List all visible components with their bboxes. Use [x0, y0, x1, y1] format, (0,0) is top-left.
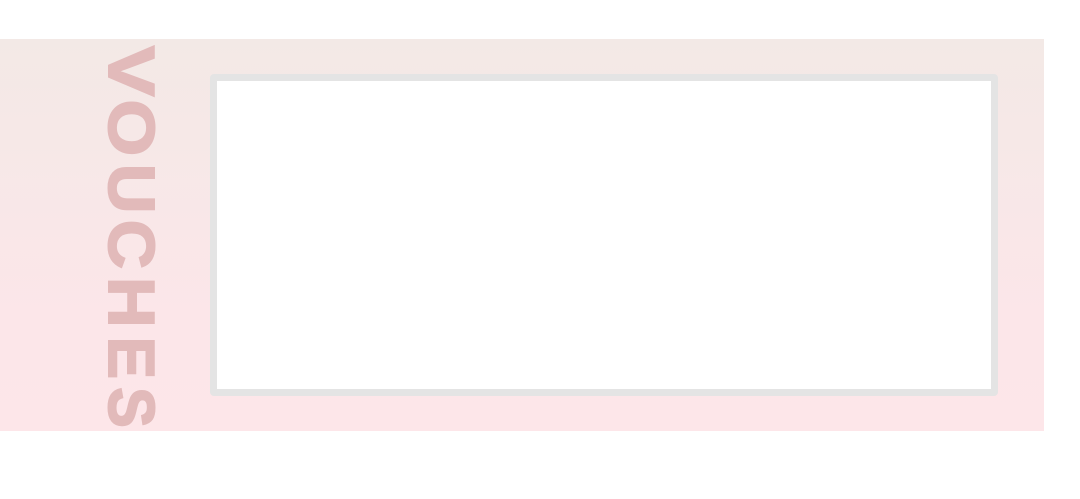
heading: vertical VOUCHES: V	[95, 46, 168, 96]
panel: empty white card with grey border	[210, 74, 998, 396]
heading: vertical VOUCHES: S	[95, 387, 168, 428]
heading: vertical VOUCHES: E	[95, 337, 168, 379]
heading: vertical VOUCHES: C	[95, 220, 168, 269]
heading: vertical VOUCHES: H	[95, 277, 168, 328]
heading: vertical VOUCHES: O	[95, 100, 168, 156]
panel: pink gradient background	[0, 39, 1044, 431]
heading: vertical VOUCHES: U	[95, 164, 168, 213]
